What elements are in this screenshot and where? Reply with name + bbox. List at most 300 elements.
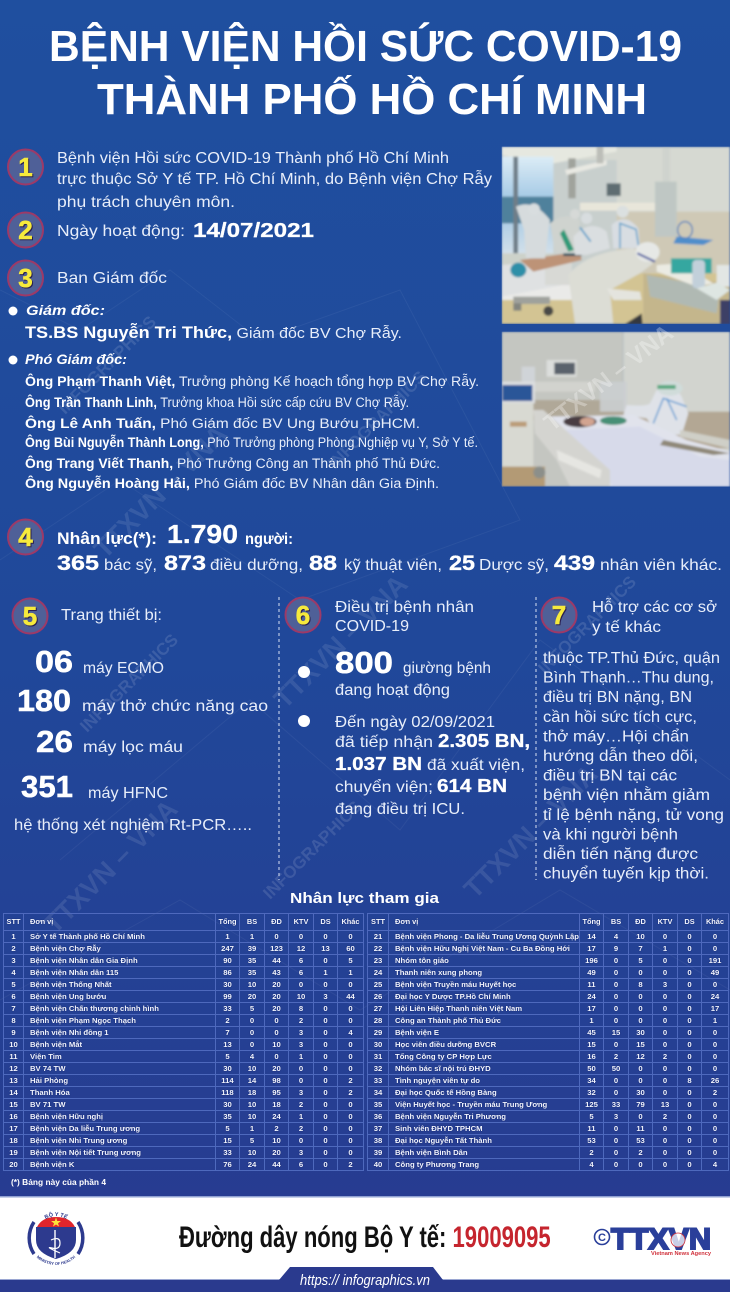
item 4: personnel: nhân viên khác.: [600, 557, 722, 574]
table: staffing units 1-20: 95: [272, 1088, 281, 1096]
deputy directors: Ông Bùi Nguyễn Thành Long, Phó Trưởng phòng Phòng Nghiệp vụ Y, Sở Y tế.: [25, 435, 478, 450]
table: staffing units 21-40: 1: [713, 1016, 717, 1024]
table: staffing units 21-40: 17: [587, 1004, 596, 1012]
table: staffing units 1-20: Tổng: [218, 917, 237, 926]
table: staffing units 1-20: 0: [250, 1028, 254, 1036]
table: staffing units 1-20: 13: [223, 1040, 232, 1048]
table: staffing units 1-20: 0: [274, 932, 279, 940]
table: staffing units 21-40: 0: [713, 1124, 717, 1132]
table: staffing units 21-40: 53: [587, 1136, 596, 1144]
table: staffing units 21-40: 0: [663, 1124, 667, 1132]
table: staffing units 21-40: 0: [614, 1124, 618, 1132]
table: staffing units 21-40: 0: [663, 1136, 667, 1144]
table: staffing units 1-20: 10: [248, 980, 256, 988]
item 7: support to other facilities: và khi người bệnh: [543, 826, 678, 843]
table: staffing units 21-40: 0: [687, 1004, 692, 1012]
table: staffing units 21-40: 0: [687, 944, 692, 952]
table: staffing units 21-40: 15: [587, 1040, 596, 1048]
item 4: personnel: 88: [309, 552, 337, 575]
photo watermark: TTXVN – VNA: [539, 319, 679, 437]
table: staffing units 1-20: 0: [348, 1064, 353, 1072]
table: staffing units 1-20: 0: [299, 1136, 303, 1144]
table: staffing units 21-40: 30: [636, 1088, 645, 1096]
item 7: support to other facilities: điều trị BN tại các: [543, 768, 677, 785]
table: staffing units 21-40: 0: [687, 992, 692, 1000]
table: staffing units 1-20: 44: [272, 1160, 281, 1168]
table: staffing units 21-40: 0: [663, 932, 667, 940]
table: staffing units 1-20: 10: [9, 1040, 18, 1048]
table: staffing units 21-40: BS: [611, 917, 621, 926]
table: staffing units 1-20: Bệnh viện Hữu nghị: [30, 1112, 103, 1120]
item 2: start date: [8, 212, 314, 248]
table: staffing units 21-40: 45: [587, 1028, 596, 1036]
table: staffing units 21-40: 0: [663, 968, 667, 976]
table: staffing units 21-40: 24: [711, 992, 719, 1000]
table: staffing units 21-40: [367, 913, 729, 1171]
table: staffing units 1-20: 30: [223, 1064, 232, 1072]
table: staffing units 21-40: 0: [638, 968, 643, 976]
table: staffing units 1-20: Thanh Hóa: [30, 1088, 70, 1096]
table: staffing units 1-20: 14: [9, 1088, 18, 1096]
table: staffing units 21-40: 79: [636, 1100, 645, 1108]
table: staffing units 1-20: 5: [250, 1004, 254, 1012]
table: staffing units 21-40: 0: [638, 1160, 643, 1168]
table: staffing units 21-40: 10: [636, 932, 645, 940]
title: BỆNH VIỆN HỒI SỨC COVID-19: [49, 21, 682, 71]
table: staffing units 21-40: 26: [374, 992, 382, 1000]
table: staffing units 1-20: 1: [348, 968, 353, 976]
table: staffing units 21-40: 0: [614, 1136, 618, 1144]
table: staffing units 21-40: 0: [713, 932, 717, 940]
item 6: patient treatment: 1.037 BN: [335, 754, 422, 774]
item 7: support to other facilities: bệnh viện nhằm giảm: [543, 785, 710, 804]
table: staffing units 21-40: 36: [374, 1112, 382, 1120]
table: staffing units 21-40: Khác: [706, 917, 724, 926]
table: staffing units 1-20: 4: [348, 1028, 353, 1036]
table: staffing units 1-20: 114: [221, 1076, 234, 1084]
table: staffing units 21-40: 0: [663, 1040, 667, 1048]
table: staffing units 21-40: 0: [663, 1088, 667, 1096]
item 6: patient treatment: Đến ngày 02/09/2021: [335, 714, 495, 731]
table: staffing units 1-20: 2: [299, 1100, 303, 1108]
table: staffing units 21-40: 21: [374, 932, 382, 940]
table: staffing units 1-20: 3: [299, 1088, 303, 1096]
table: staffing units 21-40: 1: [663, 944, 667, 952]
table: staffing units 21-40: 0: [638, 992, 643, 1000]
table: staffing units 21-40: 1: [589, 1016, 594, 1024]
table: staffing units 1-20: Bệnh viện Nhi Trung ương: [30, 1136, 127, 1144]
item 5: equipment: 06: [35, 644, 73, 679]
table: staffing units 1-20: Viện Tim: [30, 1052, 62, 1060]
table: staffing units 21-40: 0: [614, 956, 618, 964]
table: staffing units 21-40: Bệnh viện Hữu Nghị Việt Nam - Cu Ba Đồng Hới: [395, 944, 570, 952]
item 7: support to other facilities: tỉ lệ bệnh nặng, tử vong: [543, 807, 724, 824]
watermarks: INFOGRAPHICS: [259, 797, 365, 903]
table: staffing units 1-20: 0: [274, 1016, 279, 1024]
table: staffing units 21-40: 5: [589, 1112, 594, 1120]
table: staffing units 1-20: 0: [250, 1040, 254, 1048]
table: staffing units 21-40: 0: [614, 1148, 618, 1156]
table: staffing units 1-20: 0: [348, 932, 353, 940]
table: staffing units 1-20: 30: [223, 980, 232, 988]
table: staffing units 1-20: 0: [299, 980, 303, 988]
table: staffing units 1-20: 247: [221, 944, 234, 952]
table: staffing units 21-40: 0: [638, 1112, 643, 1120]
table: staffing units 21-40: 0: [614, 1016, 618, 1024]
item 1: description: trực thuộc Sở Y tế TP. Hồ Chí Minh, do Bệnh viện Chợ Rẫy: [57, 169, 492, 188]
table: staffing units 1-20: 10: [248, 1148, 256, 1156]
table: staffing units 21-40: 0: [663, 1028, 667, 1036]
item 1: description: 1: [18, 152, 33, 182]
table: staffing units 1-20: 15: [9, 1100, 18, 1108]
item 6: patient treatment: 2.305 BN,: [438, 731, 530, 751]
table: staffing units 21-40: 15: [636, 1040, 645, 1048]
table: staffing units 1-20: 3: [299, 1040, 303, 1048]
table: staffing units 21-40: 0: [713, 1112, 717, 1120]
item 3: board of directors: [8, 260, 167, 296]
item 6: patient treatment: đang điều trị ICU.: [335, 801, 465, 818]
table: staffing units 21-40: 0: [687, 980, 692, 988]
table: staffing units 21-40: 0: [687, 1160, 692, 1168]
table: staffing units 1-20: Đơn vị: [30, 917, 53, 926]
table: staffing units 1-20: 1: [299, 1112, 303, 1120]
item 6: patient treatment: 800: [335, 645, 393, 680]
table: staffing units 1-20: 5: [225, 1052, 230, 1060]
table: staffing units 1-20: 0: [348, 1148, 353, 1156]
table: staffing units 21-40: 32: [587, 1088, 596, 1096]
deputy directors: Ông Phạm Thanh Việt, Trưởng phòng Kế hoạch tổng hợp BV Chợ Rẫy.: [25, 374, 479, 389]
table: staffing units 21-40: 0: [687, 1124, 692, 1132]
table: staffing units 1-20: 0: [299, 1076, 303, 1084]
table: staffing units 21-40: 0: [638, 1004, 643, 1012]
table: staffing units 21-40: 13: [661, 1100, 669, 1108]
table: staffing units 21-40: 2: [589, 1148, 594, 1156]
table: staffing units 21-40: 0: [687, 1016, 692, 1024]
item 6: patient treatment: Điều trị bệnh nhân: [335, 599, 474, 616]
table: staffing units 21-40: 0: [614, 992, 618, 1000]
table: staffing units 1-20: 35: [248, 968, 256, 976]
table: staffing units 21-40: 15: [612, 1028, 620, 1036]
item 7: support to other facilities: y tế khác: [592, 619, 661, 636]
table: staffing units 1-20: 0: [323, 1040, 328, 1048]
item 5: equipment: máy lọc máu: [83, 739, 183, 756]
table: staffing units 1-20: 39: [248, 944, 256, 952]
table: staffing units 1-20: 10: [272, 1040, 281, 1048]
item 7: support to other facilities: thuộc TP.Thủ Đức, quận: [543, 650, 720, 667]
table: staffing units 1-20: 33: [223, 1148, 232, 1156]
table: staffing units 21-40: Bệnh viện Bình Dân: [395, 1148, 468, 1156]
table: staffing units 21-40: KTV: [658, 917, 672, 926]
table: staffing units 1-20: 2: [348, 1076, 353, 1084]
table: staffing units 1-20: 33: [223, 1004, 232, 1012]
table: staffing units 1-20: 0: [348, 1052, 353, 1060]
table: staffing units 1-20: 3: [323, 992, 328, 1000]
footer band: [0, 1196, 730, 1292]
table: staffing units 21-40: 0: [663, 1016, 667, 1024]
table: staffing units 1-20: 0: [274, 1028, 279, 1036]
table: staffing units 21-40: 37: [374, 1124, 382, 1132]
table: staffing units 21-40: 27: [374, 1004, 382, 1012]
photo: nurse beside patient bed: [502, 332, 730, 487]
item 1: description: phụ trách chuyên môn.: [57, 194, 235, 211]
table: staffing units 21-40: 30: [636, 1028, 645, 1036]
table: staffing units 1-20: KTV: [294, 917, 308, 926]
table: staffing units 1-20: 0: [250, 1016, 254, 1024]
director: [8, 302, 402, 342]
table: staffing units 21-40: Viện Huyết học - Truyền máu Trung Ương: [395, 1100, 547, 1108]
table: staffing units 21-40: 5: [638, 956, 643, 964]
table: staffing units 21-40: 0: [713, 1052, 717, 1060]
item 3: board of directors: 3: [18, 263, 33, 293]
table: staffing units 1-20: 20: [272, 992, 281, 1000]
table: staffing units 1-20: 1: [250, 1124, 254, 1132]
director: TS.BS Nguyễn Tri Thức, Giám đốc BV Chợ Rẫy.: [25, 323, 402, 342]
table: staffing units 21-40: 17: [587, 944, 596, 952]
table: staffing units 1-20: 0: [323, 1148, 328, 1156]
table: staffing units 21-40: 0: [638, 1016, 643, 1024]
watermarks: TTXVN – VNA: [268, 569, 413, 714]
table: staffing units 1-20: 5: [250, 1136, 254, 1144]
table: staffing units 1-20: 0: [323, 1100, 328, 1108]
deputy directors: [8, 351, 479, 491]
table: staffing units 21-40: 196: [585, 956, 598, 964]
table: staffing units 1-20: Bệnh viện Thống Nhất: [30, 980, 112, 988]
table: staffing units 21-40: 0: [614, 1088, 618, 1096]
table: staffing units 21-40: 125: [585, 1100, 598, 1108]
table: staffing units 21-40: Nhóm bác sĩ nội trú ĐHYD: [395, 1064, 491, 1072]
item 6: patient treatment: [286, 598, 530, 818]
table: staffing units 1-20: 20: [272, 1148, 281, 1156]
table: staffing units 1-20: 0: [323, 1004, 328, 1012]
table: staffing units 1-20: 123: [270, 944, 283, 952]
table: staffing units 1-20: 60: [346, 944, 355, 952]
table: staffing units 21-40: 0: [663, 1004, 667, 1012]
table: staffing units 1-20: 99: [223, 992, 232, 1000]
table: staffing units 1-20: 44: [346, 992, 355, 1000]
table: staffing units 21-40: 17: [711, 1004, 719, 1012]
table: staffing units 1-20: 19: [9, 1148, 18, 1156]
table: staffing units 1-20: 0: [348, 1124, 353, 1132]
item 2: start date: Ngày hoạt động:: [57, 223, 185, 240]
table: staffing units 21-40: 33: [612, 1100, 620, 1108]
table: staffing units 21-40: 0: [687, 1052, 692, 1060]
table: staffing units 1-20: Bệnh viện Nhân dân Gia Định: [30, 956, 138, 964]
table: staffing units 1-20: 2: [225, 1016, 230, 1024]
table: staffing units 1-20: BV 71 TW: [30, 1100, 65, 1108]
table: staffing units 21-40: Bệnh viện Truyền máu Huyết học: [395, 980, 516, 988]
table: staffing units 1-20: 35: [248, 956, 256, 964]
item 6: patient treatment: đã xuất viện,: [427, 757, 525, 774]
table: staffing units 21-40: 0: [713, 944, 717, 952]
item 5: equipment: máy ECMO: [83, 660, 164, 677]
logo: ministry of health: [27, 1212, 85, 1265]
table: staffing units 21-40: 35: [374, 1100, 382, 1108]
item 5: equipment: 180: [17, 683, 71, 718]
logo: ministry of health: MINISTRY OF HEALTH: [36, 1255, 76, 1265]
table: staffing units 1-20: BS: [247, 917, 257, 926]
table: staffing units 1-20: 18: [248, 1088, 256, 1096]
item 7: support to other facilities: Bình Thạnh…Thu dung,: [543, 670, 714, 687]
watermarks: INFOGRAPHICS: [534, 572, 640, 678]
item 5: equipment: máy HFNC: [88, 785, 168, 802]
table: staffing units 21-40: 0: [687, 956, 692, 964]
hotline: Đường dây nóng Bộ Y tế: 19009095: [179, 1222, 551, 1254]
table: staffing units 21-40: 0: [663, 1064, 667, 1072]
table: staffing units 1-20: 10: [297, 992, 305, 1000]
watermarks: TTXVN – VNA: [38, 794, 183, 939]
table: staffing units 21-40: 0: [713, 1040, 717, 1048]
table: staffing units 21-40: 34: [374, 1088, 382, 1096]
table: staffing units 21-40: 49: [711, 968, 719, 976]
table: staffing units 21-40: 23: [374, 956, 382, 964]
table: staffing units 21-40: Đại học Y Dược TP.Hồ Chí Minh: [395, 992, 511, 1000]
table: staffing units 21-40: 0: [614, 980, 618, 988]
table: staffing units 1-20: 20: [272, 1064, 281, 1072]
table: staffing units 21-40: 12: [636, 1052, 645, 1060]
table: staffing units 1-20: 6: [299, 956, 303, 964]
table: staffing units 1-20: 0: [348, 980, 353, 988]
table: staffing units 21-40: Tổng: [582, 917, 601, 926]
table: staffing units 1-20: 16: [9, 1112, 18, 1120]
deputy directors: Ông Lê Anh Tuấn, Phó Giám đốc BV Ung Bướu TpHCM.: [25, 416, 420, 431]
item 4: personnel: kỹ thuật viên,: [344, 557, 442, 574]
table: staffing units 1-20: 5: [225, 1124, 230, 1132]
item 4: personnel: Nhân lực(*):: [57, 530, 157, 548]
table: staffing units 21-40: Đơn vị: [395, 917, 418, 926]
item 7: support to other facilities: [542, 597, 724, 883]
table: staffing units 1-20: 17: [9, 1124, 18, 1132]
table: staffing units 1-20: 10: [248, 1100, 256, 1108]
item 4: personnel: 1.790: [167, 519, 238, 549]
title: [49, 21, 682, 124]
table: staffing units 1-20: 7: [11, 1004, 16, 1012]
item 7: support to other facilities: thở máy…Hội chẩn: [543, 727, 689, 745]
table: staffing units 1-20: STT: [7, 917, 20, 926]
table: staffing units 21-40: 30: [374, 1040, 382, 1048]
item 7: support to other facilities: diễn tiến nặng được: [543, 844, 698, 863]
table: staffing units 21-40: 22: [374, 944, 382, 952]
table heading: Nhân lực tham gia: [290, 890, 440, 907]
table: staffing units 1-20: Bệnh viện Ung bướu: [30, 992, 106, 1000]
table: staffing units 1-20: 0: [348, 1136, 353, 1144]
table: staffing units 1-20: 20: [272, 1004, 281, 1012]
table: staffing units 21-40: 11: [636, 1124, 645, 1132]
table: staffing units 21-40: 4: [589, 1160, 594, 1168]
table: staffing units 21-40: 4: [614, 932, 618, 940]
table: staffing units 21-40: 0: [614, 968, 618, 976]
item 4: personnel: điều dưỡng,: [210, 557, 303, 574]
table: staffing units 1-20: 43: [272, 968, 281, 976]
table: staffing units 1-20: 2: [348, 1160, 353, 1168]
title: THÀNH PHỐ HỒ CHÍ MINH: [97, 73, 647, 124]
table: staffing units 21-40: 0: [614, 1076, 618, 1084]
table: staffing units 1-20: 35: [223, 1112, 232, 1120]
table: staffing units 1-20: 20: [9, 1160, 18, 1168]
item 7: support to other facilities: cần hồi sức tích cực,: [543, 709, 697, 726]
table: staffing units 1-20: 9: [11, 1028, 16, 1036]
table: staffing units 1-20: 8: [11, 1016, 16, 1024]
table: staffing units 21-40: 31: [374, 1052, 382, 1060]
item 2: start date: 2: [18, 215, 33, 245]
table: staffing units 21-40: Hội Liên Hiệp Thanh niên Việt Nam: [395, 1004, 522, 1012]
item 4: personnel: bác sỹ,: [104, 557, 157, 574]
deputy directors: Ông Trần Thanh Linh, Trưởng khoa Hồi sức cấp cứu BV Chợ Rẫy.: [25, 395, 409, 410]
table: staffing units 1-20: 5: [11, 980, 16, 988]
table: staffing units 21-40: Công an Thành phố Thủ Đức: [395, 1016, 501, 1024]
table: staffing units 1-20: 0: [323, 1052, 328, 1060]
deputy directors: Ông Trang Viết Thanh, Phó Trưởng Công an Thành phố Thủ Đức.: [25, 456, 440, 471]
table: staffing units 1-20: 10: [248, 1112, 256, 1120]
item 6: patient treatment: COVID-19: [335, 618, 409, 635]
table: staffing units 1-20: 14: [248, 1076, 256, 1084]
table: staffing units 21-40: 26: [711, 1076, 719, 1084]
table: staffing units 1-20: [3, 913, 364, 1171]
item 6: patient treatment: đang hoạt động: [335, 682, 450, 699]
item 5: equipment: 26: [36, 724, 73, 759]
table: staffing units 21-40: DS: [684, 917, 695, 926]
table: staffing units 1-20: 1: [225, 932, 230, 940]
table: staffing units 21-40: Tình nguyện viên tự do: [395, 1076, 480, 1084]
table: staffing units 21-40: 2: [663, 1052, 667, 1060]
table: staffing units 1-20: 2: [299, 1124, 303, 1132]
watermarks: TTXVN – VNA: [458, 759, 603, 904]
table: staffing units 21-40: 4: [713, 1160, 717, 1168]
table: staffing units 21-40: 0: [663, 956, 667, 964]
item 6: patient treatment: 6: [296, 600, 310, 630]
table: staffing units 21-40: 2: [663, 1112, 667, 1120]
item 4: personnel: 365: [57, 552, 99, 575]
item 1: description: Bệnh viện Hồi sức COVID-19 Thành phố Hồ Chí Minh: [57, 150, 449, 167]
table: staffing units 1-20: 10: [248, 1064, 256, 1072]
item 5: equipment: máy thở chức năng cao: [82, 698, 268, 715]
table: staffing units 21-40: 0: [713, 980, 717, 988]
table: staffing units 21-40: Thanh niên xung phong: [395, 968, 482, 976]
table: staffing units 1-20: 0: [323, 980, 328, 988]
table: staffing units 1-20: Bệnh viện Chấn thương chỉnh hình: [30, 1004, 159, 1012]
table: staffing units 1-20: 44: [272, 956, 281, 964]
table: staffing units 21-40: 50: [612, 1064, 620, 1072]
item 1: description: [8, 150, 492, 211]
item 6: patient treatment: giường bệnh: [403, 660, 491, 677]
table: staffing units 21-40: 32: [374, 1064, 382, 1072]
table: staffing units 21-40: 33: [374, 1076, 382, 1084]
table: staffing units 21-40: Học viên điều dưỡng BVCR: [395, 1040, 496, 1048]
table: staffing units 1-20: 24: [272, 1112, 281, 1120]
table: staffing units 1-20: 1: [323, 968, 328, 976]
table: staffing units 21-40: Nhóm tôn giáo: [395, 956, 449, 964]
table: staffing units 21-40: 7: [638, 944, 643, 952]
website tab: [279, 1267, 443, 1289]
table: staffing units 1-20: 1: [11, 932, 16, 940]
item 4: personnel: 25: [449, 552, 475, 575]
table: staffing units 21-40: 0: [614, 1004, 618, 1012]
table: staffing units 21-40: 191: [709, 956, 721, 964]
table: staffing units 1-20: 18: [9, 1136, 18, 1144]
table: staffing units 1-20: Bệnh viện Mắt: [30, 1040, 82, 1048]
table: staffing units 21-40: 2: [638, 1148, 643, 1156]
table: staffing units 1-20: 18: [272, 1100, 281, 1108]
item 6: patient treatment: chuyển viện;: [335, 778, 433, 796]
logo: TTXVN: Vietnam News Agency: [651, 1251, 711, 1257]
table: staffing units 21-40: 3: [614, 1112, 618, 1120]
table: staffing units 21-40: Bệnh viện Phong - Da liễu Trung Ương Quỳnh Lập: [395, 932, 579, 940]
item 6: patient treatment: đã tiếp nhận: [335, 734, 433, 751]
table: staffing units 1-20: 86: [223, 968, 232, 976]
table: staffing units 1-20: 3: [299, 1148, 303, 1156]
item 3: board of directors: Ban Giám đốc: [57, 270, 167, 287]
table: staffing units 21-40: 49: [587, 968, 596, 976]
item 4: personnel: 873: [164, 552, 206, 575]
